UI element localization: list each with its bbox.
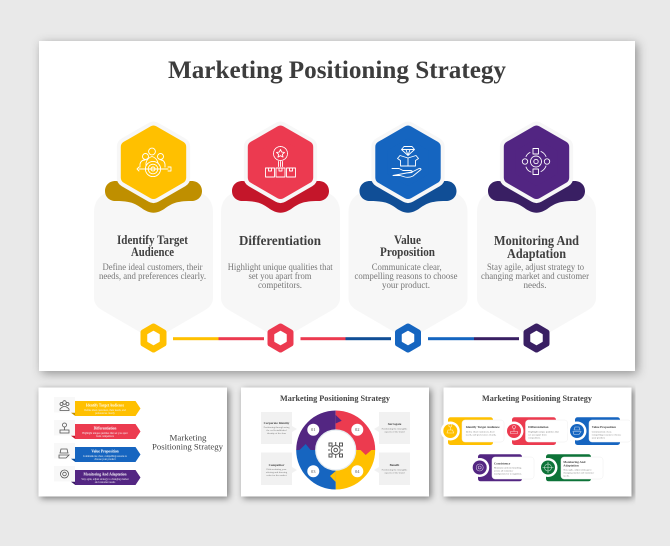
tab: monitoring: changing market and customer <box>563 472 594 474</box>
list row 2: Differentiation <box>94 426 116 430</box>
number badges: 04 <box>355 469 360 474</box>
list row 3: choose your product <box>94 458 116 461</box>
tab: monitoring: Monitoring And <box>563 460 586 464</box>
description: needs. <box>524 281 546 291</box>
marker: purple <box>526 326 546 350</box>
description <box>228 263 333 291</box>
info boxes: Positioning the intangible <box>382 468 408 472</box>
panel: differentiation <box>221 132 340 340</box>
list row 1 <box>54 397 140 416</box>
number badges <box>307 424 363 477</box>
description: needs, and preferences clearly. <box>99 271 206 282</box>
info boxes: Benefit <box>390 463 400 467</box>
icon: medal and boxes <box>266 146 296 177</box>
description: Define ideal customers, their <box>102 262 203 273</box>
info boxes: aspects of the brand <box>385 430 405 434</box>
number badges: 01 <box>311 427 316 432</box>
tab: consistency: Consistency <box>494 462 511 466</box>
panel: monitoring and adaptation <box>477 132 596 340</box>
tab: value proposition <box>568 417 631 445</box>
list row 2: Highlight unique qualities that set you apart <box>82 432 128 435</box>
thumbnail heading: Marketing <box>170 432 207 442</box>
heading: Identify Target <box>117 233 189 247</box>
tab: differentiation: competitors. <box>528 436 541 440</box>
thumbnail heading <box>152 432 224 452</box>
marker: blue <box>398 326 418 350</box>
tab: consistency <box>470 454 534 481</box>
info boxes: Corporate Identity <box>264 421 290 425</box>
number badges: 02 <box>355 427 360 432</box>
panel: identify target audience <box>94 132 213 340</box>
number badges: 03 <box>311 469 316 474</box>
list row 1: preferences clearly <box>95 412 116 415</box>
list row 4: Stay agile, adjust strategy to changing market <box>81 478 129 481</box>
donut chart <box>296 410 375 490</box>
description <box>481 263 590 291</box>
heading <box>117 233 189 259</box>
timeline <box>144 326 546 350</box>
info boxes: Differentiating your <box>266 468 287 471</box>
tab: consistency: Maintain uniform branding <box>494 466 522 470</box>
list row 2 <box>54 420 140 439</box>
info boxes: Positioning through using <box>264 426 290 429</box>
thumbnail slide: tabs <box>441 388 632 496</box>
list row 3: Communicate clear, compelling reasons to <box>83 455 128 458</box>
info boxes: Competitor <box>269 463 285 467</box>
tab: differentiation <box>504 417 568 445</box>
description: set you apart from <box>248 271 312 282</box>
description: Stay agile, adjust strategy to <box>487 263 584 273</box>
list row 4: and customer needs <box>95 481 115 484</box>
tab: identify: needs, and preferences clearly. <box>466 434 497 436</box>
tab: value proposition: your product. <box>592 436 606 440</box>
description: Communicate clear, <box>372 263 442 273</box>
info boxes: value for the market <box>266 474 287 477</box>
tab: differentiation: Highlight unique qualities that <box>528 430 559 434</box>
info boxes: identity of the firm <box>267 432 286 435</box>
panel: value proposition <box>348 132 468 340</box>
icon: network chip <box>328 442 343 458</box>
tab: value proposition: Value Proposition <box>592 425 616 429</box>
icon: audience target <box>137 148 171 177</box>
tab: monitoring: Stay agile, adjust strategy to <box>563 468 592 472</box>
tab: monitoring: Adaptation <box>563 464 579 468</box>
heading <box>494 233 579 261</box>
tab: identify: Identify Target Audience <box>466 425 500 429</box>
tab: monitoring <box>538 454 603 481</box>
tab: differentiation: Differentiation <box>528 425 549 429</box>
info boxes: aspects of the brand <box>385 472 405 474</box>
heading <box>380 233 435 259</box>
description <box>354 263 458 291</box>
description: your product. <box>382 281 430 291</box>
description <box>99 262 206 282</box>
tab: monitoring: needs. <box>563 474 570 478</box>
description: Highlight unique qualities that <box>228 263 333 273</box>
marker: red <box>270 326 290 350</box>
tab: consistency: across all customer <box>494 470 513 472</box>
info boxes: the well-established <box>267 429 287 432</box>
list row 1: Identify Target Audience <box>86 404 124 408</box>
info boxes: Positioning the intangible <box>382 428 408 430</box>
tab: differentiation: set you apart from <box>528 434 547 436</box>
list row 2: from competitors <box>96 435 114 438</box>
heading: Proposition <box>380 245 435 259</box>
tab: consistency: touchpoints for recognition. <box>494 472 522 476</box>
thumbnail slide: donut <box>241 388 429 496</box>
icon: cycle with gear <box>522 148 550 174</box>
heading: Adaptation <box>507 246 566 261</box>
heading: Value <box>394 233 421 247</box>
description: compelling reasons to choose <box>354 272 458 282</box>
list row 3 <box>54 443 140 462</box>
info boxes: offering and showing <box>266 471 288 474</box>
info boxes: Surrogate <box>388 422 402 426</box>
tab: value proposition: Communicate clear, <box>592 430 612 434</box>
thumbnail slide: arrow list <box>38 388 227 496</box>
thumbnail title: Marketing Positioning Strategy <box>280 393 391 403</box>
icon: gem box on hand <box>392 146 421 177</box>
tab: value proposition: compelling reasons to choose <box>592 434 622 436</box>
list row 3: Value Proposition <box>91 450 119 454</box>
tab: identify <box>441 417 504 445</box>
tab: identify: Define ideal customers, their <box>466 430 495 434</box>
list row 4: Monitoring And Adaptation <box>84 472 126 476</box>
heading: Monitoring And <box>494 233 579 248</box>
main slide <box>39 41 635 371</box>
heading: Differentiation <box>239 233 321 248</box>
description: competitors. <box>258 281 302 291</box>
info boxes <box>261 412 410 485</box>
list row 1: Define ideal customers, their needs, and <box>84 409 126 412</box>
description: changing market and customer <box>481 272 590 282</box>
marker: yellow <box>144 326 164 350</box>
title: Marketing Positioning Strategy <box>168 55 506 84</box>
heading: Audience <box>131 245 174 259</box>
thumbnail heading: Positioning Strategy <box>152 442 224 452</box>
list row 4 <box>54 466 140 485</box>
thumbnail title: Marketing Positioning Strategy <box>482 393 593 403</box>
